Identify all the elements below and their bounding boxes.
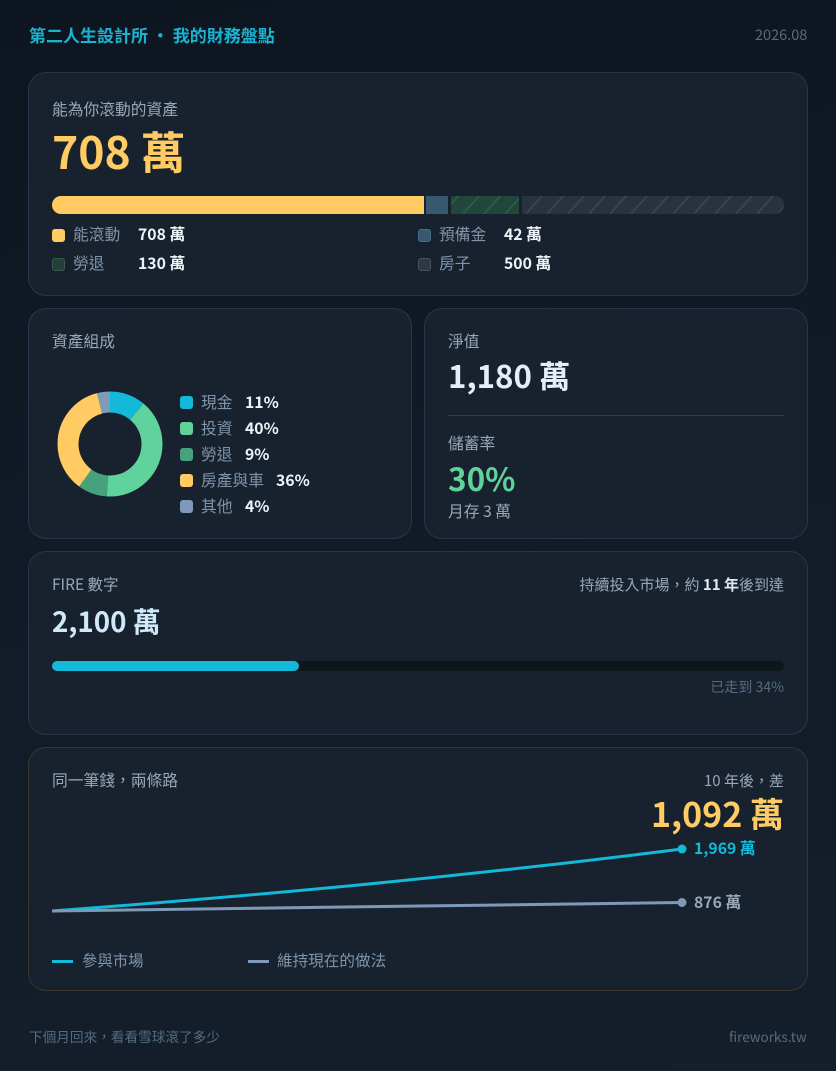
footer site: fireworks.tw <box>729 1026 807 1046</box>
net worth label: 淨值 <box>448 329 480 352</box>
panel: rolling assets: 勞退 <box>73 251 104 274</box>
legend: 勞退 <box>52 251 185 274</box>
FIRE value: 2,100 萬 <box>52 600 161 640</box>
donut legend: 40% <box>245 416 279 438</box>
FIRE note: 持續投入市場，約 11 年後到達 <box>580 574 784 595</box>
panel: rolling assets: 42 萬 <box>504 222 542 245</box>
legend: stay <box>248 949 386 971</box>
panel: rolling assets <box>28 72 808 296</box>
legend: 房子 <box>418 251 551 274</box>
panel label: 資產組成 <box>52 329 115 352</box>
progress bar <box>52 661 784 671</box>
FIRE label: FIRE 數字 <box>52 572 119 594</box>
panel: rolling assets: 130 萬 <box>138 251 185 274</box>
progress note: 已走到 34% <box>710 677 784 697</box>
panel label: 同一筆錢，兩條路 <box>52 768 178 791</box>
panel label: 能為你滾動的資產 <box>52 96 178 120</box>
label: stay value: 876 萬 <box>694 890 741 912</box>
line chart <box>52 844 686 912</box>
net worth value: 1,180 萬 <box>448 352 570 397</box>
difference label: 10 年後，差 <box>704 770 784 791</box>
donut legend: 現金 <box>201 390 232 412</box>
donut legend: 36% <box>276 468 310 490</box>
panel: two paths: 參與市場 <box>82 949 144 971</box>
panel: rolling assets: 房子 <box>439 251 470 274</box>
legend: market <box>52 949 144 971</box>
donut legend <box>180 390 310 516</box>
donut legend: 9% <box>245 442 269 464</box>
donut legend: 4% <box>245 494 269 516</box>
savings rate value: 30% <box>448 455 516 501</box>
panel: rolling assets: 預備金 <box>439 222 486 245</box>
donut legend: 勞退 <box>201 442 232 464</box>
panel: two paths: 維持現在的做法 <box>277 949 386 971</box>
footer note: 下個月回來，看看雪球滾了多少 <box>29 1026 220 1046</box>
legend: 預備金 <box>418 222 542 245</box>
panel: two paths <box>28 747 808 991</box>
header title: 第二人生設計所 ・ 我的財務盤點 <box>29 22 275 46</box>
panel: net worth and savings <box>424 308 808 539</box>
header date: 2026.08 <box>755 24 807 44</box>
panel: FIRE number <box>28 551 808 735</box>
panel: asset composition <box>28 308 412 539</box>
panel: rolling assets: 708 萬 <box>138 222 185 245</box>
panel: rolling assets: 500 萬 <box>504 251 551 274</box>
big number: 708 萬 <box>52 117 185 182</box>
legend: 能滾動 <box>52 222 185 245</box>
difference value: 1,092 萬 <box>651 788 784 837</box>
donut legend: 11% <box>245 390 279 412</box>
savings rate label: 儲蓄率 <box>448 431 495 454</box>
panel: rolling assets: 能滾動 <box>73 222 120 245</box>
monthly saving note: 月存 3 萬 <box>448 499 511 522</box>
label: market value: 1,969 萬 <box>694 836 756 858</box>
donut legend: 房產與車 <box>201 468 264 490</box>
donut legend: 投資 <box>201 416 232 438</box>
donut chart <box>58 392 162 496</box>
stacked bar <box>52 196 784 214</box>
donut legend: 其他 <box>201 494 232 516</box>
